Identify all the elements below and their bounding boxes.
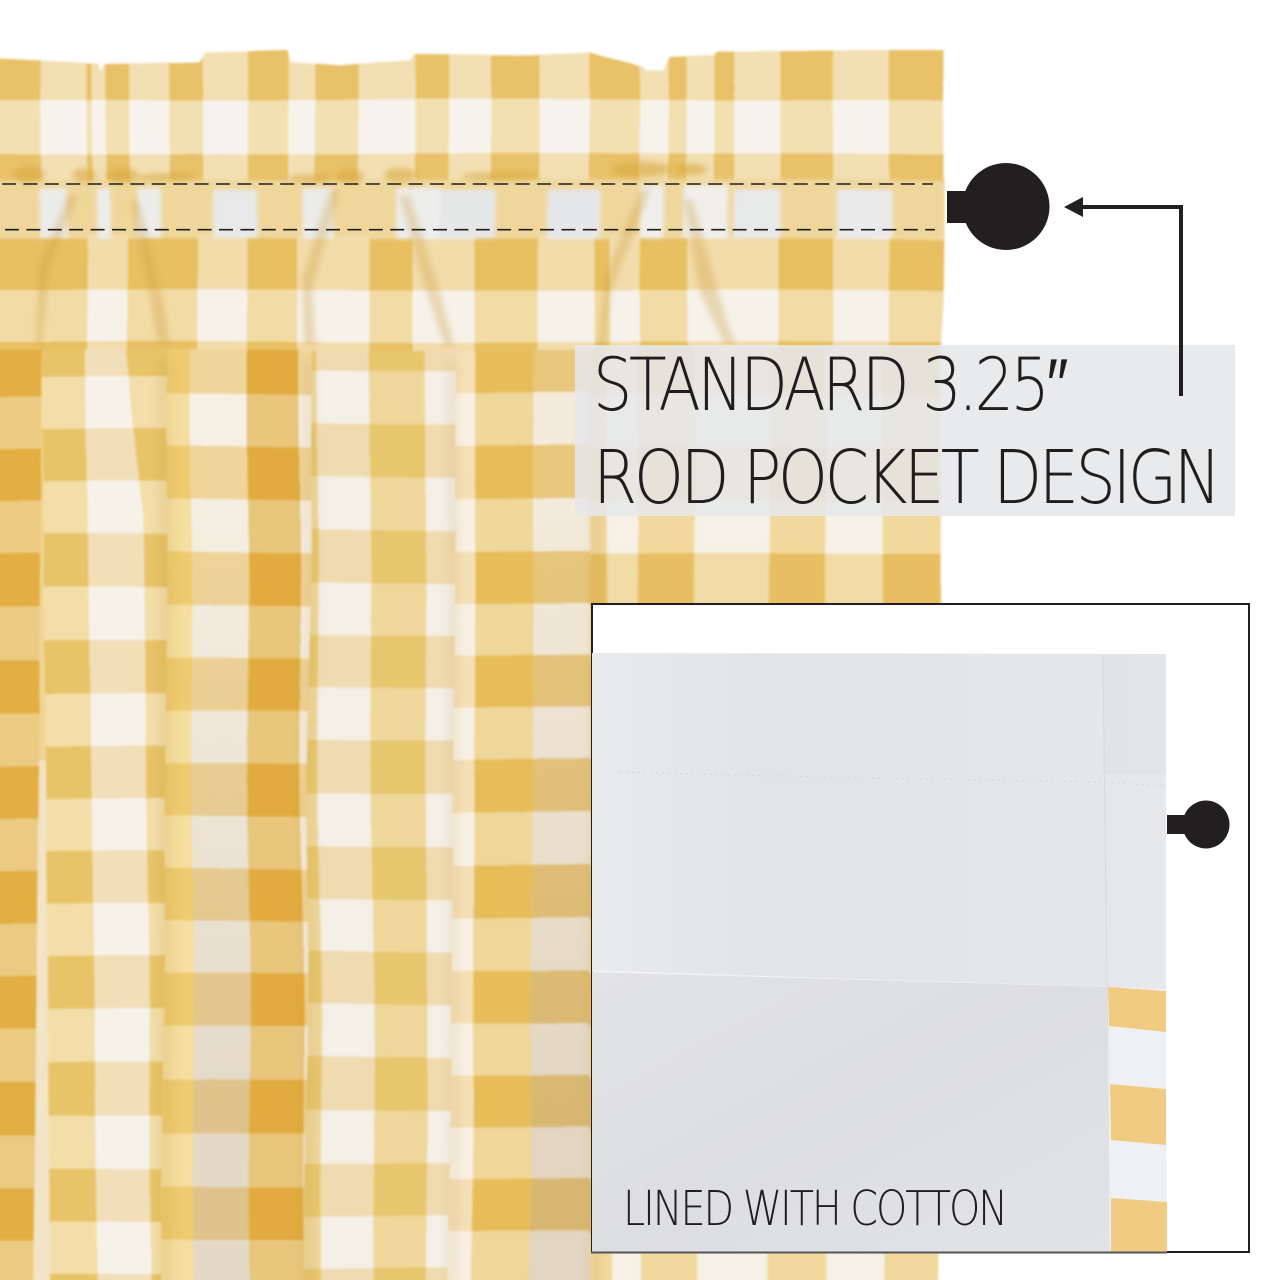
icon: small curtain rod end — [1167, 800, 1230, 848]
inset frame — [592, 604, 1249, 1252]
diagonal pleat shadows — [36, 190, 734, 345]
fabric strip: fifth fold — [448, 345, 590, 1280]
rod pocket band — [0, 180, 946, 238]
label line one: STANDARD 3.25″ — [593, 343, 1068, 428]
gathered stitching folds — [14, 162, 706, 183]
fabric strip: third fold — [160, 345, 314, 1280]
fabric strip: far left fold — [0, 345, 50, 1280]
lining text: LINED WITH COTTON — [623, 1181, 1006, 1237]
lined sheet upper hem — [592, 653, 1166, 990]
fabric strip: right fold — [590, 345, 942, 1280]
inset panel: lining detail — [591, 604, 1249, 1252]
fabric strip: fourth fold — [304, 330, 457, 1280]
callout label box: standard rod pocket — [575, 343, 1235, 521]
arrow: from label to rod — [1064, 197, 1183, 396]
fold shading over fabric — [158, 360, 602, 1280]
panel: gingham curtain fabric — [0, 48, 950, 1280]
lower ruffle below the pocket — [0, 232, 946, 350]
header base — [942, 182, 946, 234]
fabric base under the folds — [0, 340, 942, 1280]
inset bottom edge line — [591, 1252, 1167, 1254]
cotton lining lower panel — [592, 972, 1110, 1252]
icon: curtain rod end — [947, 163, 1050, 250]
fabric strip: second fold — [42, 345, 170, 1280]
rod pocket header of curtain — [0, 48, 950, 352]
upper ruffle above the pocket — [0, 48, 946, 182]
gingham side stripe — [1108, 987, 1167, 1252]
rod pocket dashed guide lines — [2, 184, 935, 230]
